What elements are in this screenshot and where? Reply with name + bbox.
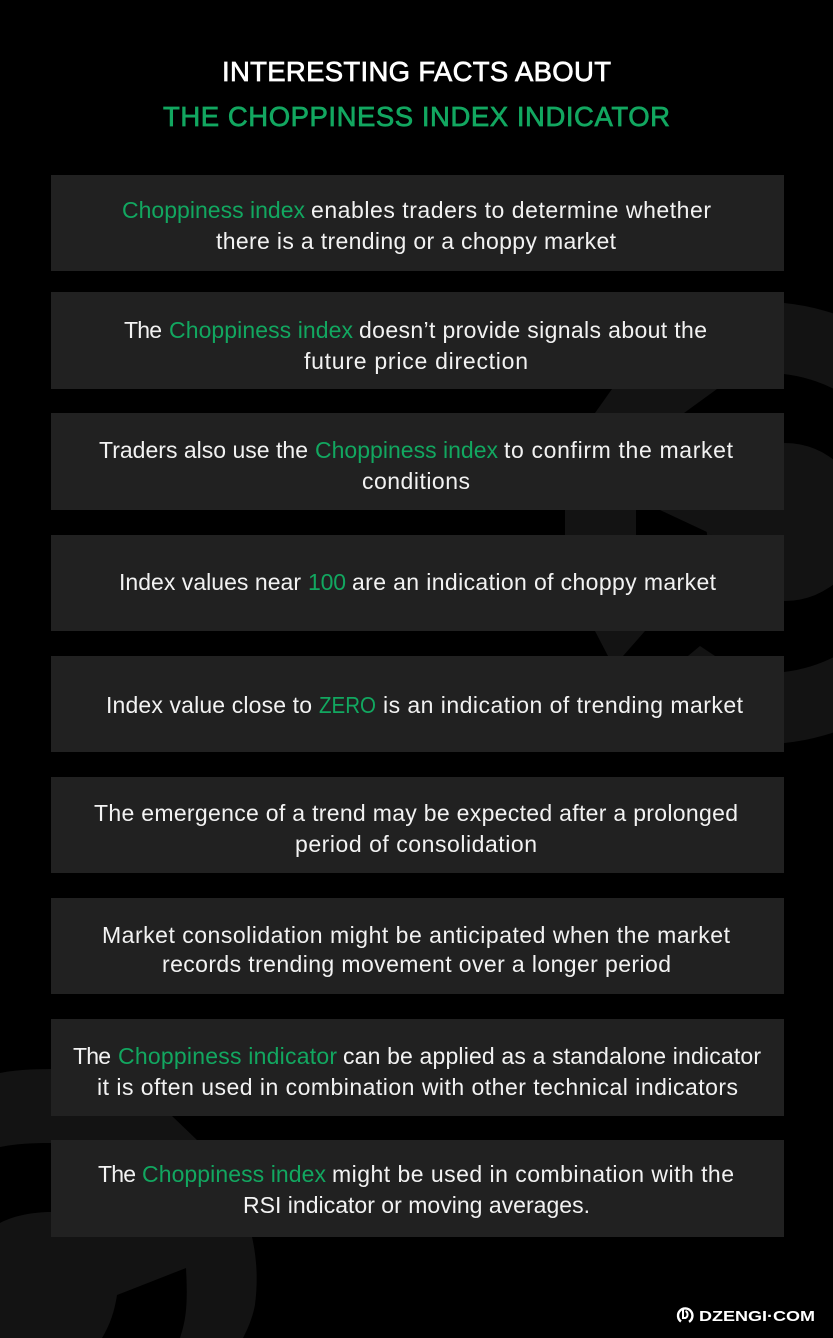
watermark: logo bottom left xyxy=(0,1069,257,1338)
panel: fact 2: future price direction xyxy=(304,348,528,374)
watermark: logo right xyxy=(565,303,833,743)
panel: fact 3: Traders also use the xyxy=(99,437,308,463)
panel: fact 6: period of consolidation xyxy=(295,831,537,857)
panel: fact 9: The xyxy=(98,1161,136,1187)
panel: fact 8: it is often used in combination with other technical indicators xyxy=(97,1074,738,1100)
panel: fact 7 xyxy=(51,898,784,994)
panel: fact 4: are an indication of choppy market xyxy=(352,569,717,595)
panel: fact 1: there is a trending or a choppy market xyxy=(216,228,617,254)
panel: fact 2 xyxy=(51,292,784,389)
panel: fact 5: Index value close to xyxy=(106,692,312,718)
panel: fact 4: Index values near xyxy=(119,569,301,595)
panel: fact 1 xyxy=(51,175,784,271)
panel: fact 4: 100 xyxy=(308,569,346,595)
panel: fact 9: Choppiness index xyxy=(142,1161,326,1187)
logo: dzengi.com: DZENGI·COM xyxy=(699,1308,815,1325)
panel: fact 5 xyxy=(51,656,784,752)
title: INTERESTING FACTS ABOUT xyxy=(222,56,611,87)
panel: fact 3: conditions xyxy=(362,468,470,494)
panel: fact 2: The xyxy=(124,317,162,343)
panel: fact 8 xyxy=(51,1019,784,1116)
panel: fact 8: The xyxy=(73,1043,111,1069)
panel: fact 7: Market consolidation might be anticipated when the market xyxy=(102,922,731,948)
panel: fact 3 xyxy=(51,413,784,510)
panel: fact 2: Choppiness index xyxy=(169,317,354,343)
panel: fact 9: RSI indicator or moving averages. xyxy=(243,1192,590,1218)
panel: fact 9 xyxy=(51,1140,784,1237)
panel: fact 3: Choppiness index xyxy=(315,437,498,463)
panel: fact 6: The emergence of a trend may be expected after a prolonged xyxy=(94,800,738,826)
panel: fact 1: Choppiness index xyxy=(122,197,306,223)
panel: fact 8: can be applied as a standalone indicator xyxy=(343,1043,761,1069)
panel: fact 7: records trending movement over a longer period xyxy=(162,951,671,977)
panel: fact 8: Choppiness indicator xyxy=(118,1043,337,1069)
panel: fact 4 xyxy=(51,535,784,631)
panel: fact 6 xyxy=(51,777,784,873)
icon: logo mark xyxy=(678,1308,692,1322)
panel: fact 2: doesn’t provide signals about the xyxy=(359,317,707,343)
panel: fact 1: enables traders to determine whether xyxy=(311,197,711,223)
title xyxy=(163,56,670,132)
panel: fact 9: might be used in combination with the xyxy=(332,1161,734,1187)
panel: fact 5: ZERO xyxy=(319,692,376,718)
title: THE CHOPPINESS INDEX INDICATOR xyxy=(163,101,670,132)
panel: fact 3: to confirm the market xyxy=(504,437,734,463)
panel: fact 5: is an indication of trending market xyxy=(383,692,744,718)
